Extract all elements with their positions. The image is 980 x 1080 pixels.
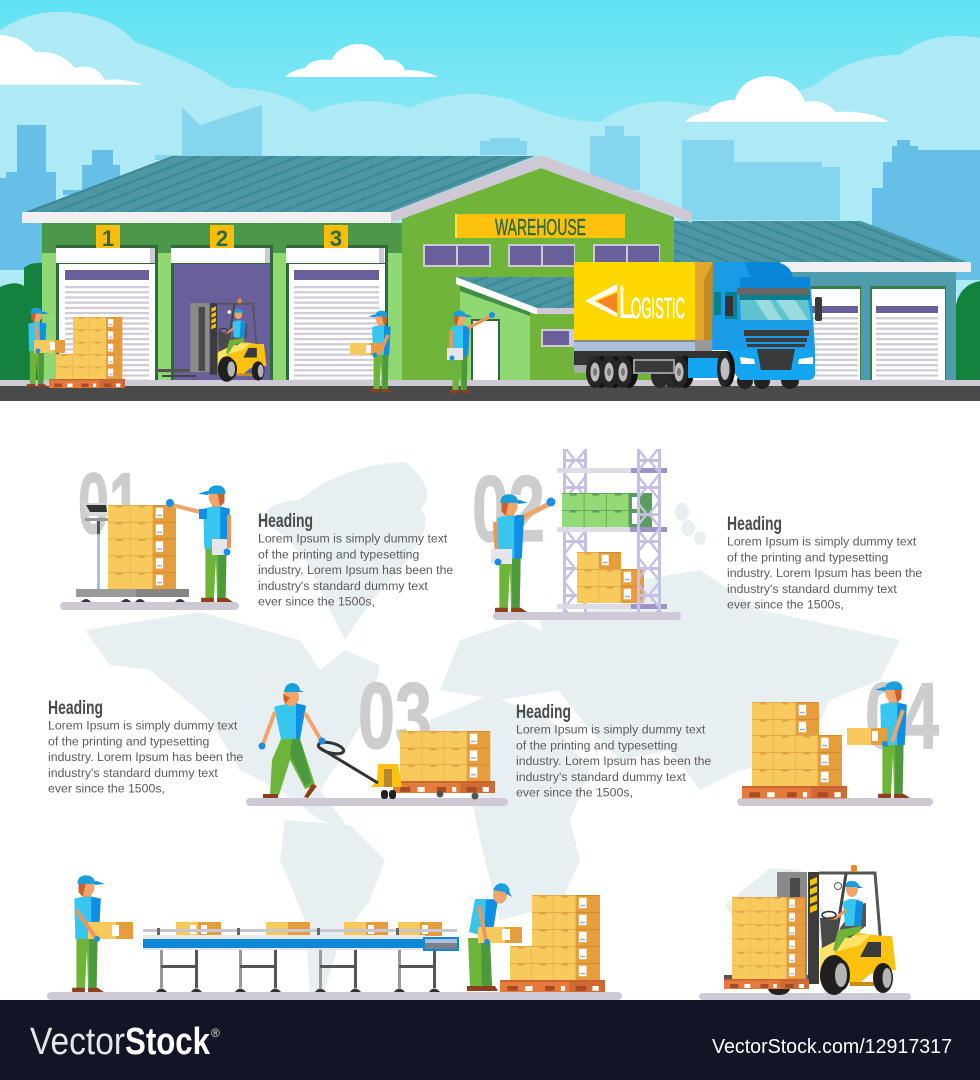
- door number 3: 3: [330, 226, 342, 251]
- annex: [456, 277, 580, 381]
- shelves: [557, 468, 667, 609]
- door number 1: [96, 225, 120, 251]
- pallet: [393, 781, 495, 793]
- body: of the printing and typesetting: [48, 734, 209, 748]
- worker at conveyor: [72, 875, 133, 992]
- door number 3: [324, 225, 348, 251]
- belt: [143, 935, 425, 939]
- step 01 big number: 01: [78, 456, 140, 552]
- step 03 text: [48, 698, 243, 796]
- body: industry. Lorem Ipsum has been the: [516, 754, 711, 768]
- step 03 pallet truck scene: [246, 731, 508, 806]
- VectorStock logo: [30, 1021, 220, 1063]
- body: industry. Lorem Ipsum has been the: [258, 563, 453, 577]
- right wing eave: [780, 262, 971, 272]
- step 04 big number: 04: [865, 663, 939, 768]
- chassis: [574, 351, 734, 365]
- warehouse building: [22, 155, 971, 386]
- body: Lorem Ipsum is simply dummy text: [258, 532, 448, 546]
- logistic logo: L: [618, 276, 635, 328]
- ground: [47, 992, 622, 1000]
- forklift scene: [699, 865, 911, 1000]
- step 02 text: [727, 514, 922, 612]
- body: ever since the 1500s,: [258, 595, 375, 609]
- cargo box: [574, 262, 695, 340]
- green boxes: [562, 493, 652, 527]
- forklift at door 2: [156, 299, 266, 382]
- body: of the printing and typesetting: [258, 547, 419, 561]
- body: industry's standard dummy text: [258, 579, 428, 593]
- body: of the printing and typesetting: [727, 550, 888, 564]
- right wing roof: [673, 221, 970, 263]
- yellow boxes: [577, 552, 644, 603]
- city skyline: [0, 105, 980, 280]
- worker 3 pointing: [447, 310, 495, 393]
- gable trim: [391, 155, 692, 223]
- ground: [699, 993, 911, 1000]
- stacking worker: [467, 883, 522, 991]
- clouds: pale backdrop: [0, 12, 980, 300]
- left upright: [563, 449, 587, 612]
- left roof: [25, 156, 535, 212]
- pallet truck: [317, 740, 478, 800]
- image id: VectorStock.com/12917317: [712, 1036, 952, 1058]
- door 2: [171, 245, 273, 381]
- main gable wall: [402, 168, 674, 382]
- upper windows: [423, 244, 660, 267]
- rear wheels: [586, 356, 799, 389]
- warehouse sign: WAREHOUSE: [495, 214, 586, 240]
- heading: Heading: [48, 698, 103, 719]
- body: industry's standard dummy text: [516, 770, 686, 784]
- footer bar: [0, 1000, 980, 1080]
- world map background: [85, 462, 900, 995]
- left wall: [42, 223, 402, 381]
- boxes: [108, 505, 153, 589]
- body: ever since the 1500s,: [48, 782, 165, 796]
- right wing wall: [780, 272, 956, 386]
- heading: Heading: [516, 702, 571, 723]
- step 01 weighing scale and boxes: [60, 503, 239, 610]
- conveyor legs: [156, 948, 440, 992]
- eave: [22, 212, 391, 223]
- scale platform: [76, 589, 136, 597]
- VectorStock logo: ®: [211, 1026, 220, 1040]
- ground: [493, 612, 681, 620]
- door number 2: 2: [216, 226, 228, 251]
- boxes: [752, 702, 796, 736]
- step 02 worker: [491, 494, 556, 612]
- door 1: [56, 245, 158, 381]
- box stack with pallet: [500, 895, 605, 992]
- box stack at door 1: [49, 317, 125, 388]
- clouds: white: [0, 35, 889, 122]
- body: Lorem Ipsum is simply dummy text: [516, 723, 706, 737]
- body: ever since the 1500s,: [516, 786, 633, 800]
- boxes: [400, 731, 467, 781]
- body: industry. Lorem Ipsum has been the: [727, 566, 922, 580]
- pallet: [742, 786, 847, 798]
- cab: [712, 262, 815, 380]
- VectorStock logo: Vector: [30, 1021, 125, 1063]
- forklift load: [724, 897, 809, 995]
- logistic logo: [585, 276, 685, 328]
- forklift: [724, 865, 896, 995]
- step 03 big number: 03: [358, 663, 432, 768]
- sky panel: [0, 0, 980, 300]
- right upright: [637, 449, 661, 612]
- ground: [246, 798, 508, 806]
- step 04 worker: [847, 681, 910, 798]
- ground: [60, 602, 239, 610]
- right wing doors: [808, 286, 946, 386]
- delivery truck: OGISTIC: [631, 293, 685, 325]
- body: ever since the 1500s,: [727, 598, 844, 612]
- belt end: [423, 937, 459, 951]
- scale display: [82, 503, 108, 516]
- step 02 big number: 02: [472, 456, 545, 561]
- step 01 text: [258, 511, 453, 609]
- step 03 walking worker: [258, 683, 326, 798]
- rail: [143, 929, 457, 932]
- body: industry's standard dummy text: [48, 766, 218, 780]
- door number 1: 1: [102, 226, 114, 251]
- ground and road: [0, 380, 980, 401]
- step 02 rack with boxes: [493, 449, 681, 620]
- boxes on belt: [176, 922, 442, 936]
- warehouse sign: [455, 214, 625, 240]
- worker 1 carrying box: [27, 308, 65, 387]
- body: of the printing and typesetting: [516, 738, 677, 752]
- heading: Heading: [258, 511, 313, 532]
- delivery truck: [574, 262, 822, 389]
- trees: [0, 263, 980, 385]
- body: Lorem Ipsum is simply dummy text: [727, 535, 917, 549]
- scale post: [97, 522, 100, 589]
- step 01 worker: [166, 485, 233, 602]
- body: industry's standard dummy text: [727, 582, 897, 596]
- heading: Heading: [727, 514, 782, 535]
- door 3: [286, 245, 388, 381]
- ground: [737, 798, 933, 806]
- conveyor scene: [47, 922, 622, 1000]
- step 04 text: [516, 702, 711, 800]
- step 04 boxes scene: [737, 702, 933, 806]
- VectorStock logo: Stock: [125, 1021, 211, 1063]
- body: Lorem Ipsum is simply dummy text: [48, 719, 238, 733]
- worker 2 carrying box: [350, 311, 393, 392]
- door number 2: [210, 225, 234, 251]
- body: industry. Lorem Ipsum has been the: [48, 750, 243, 764]
